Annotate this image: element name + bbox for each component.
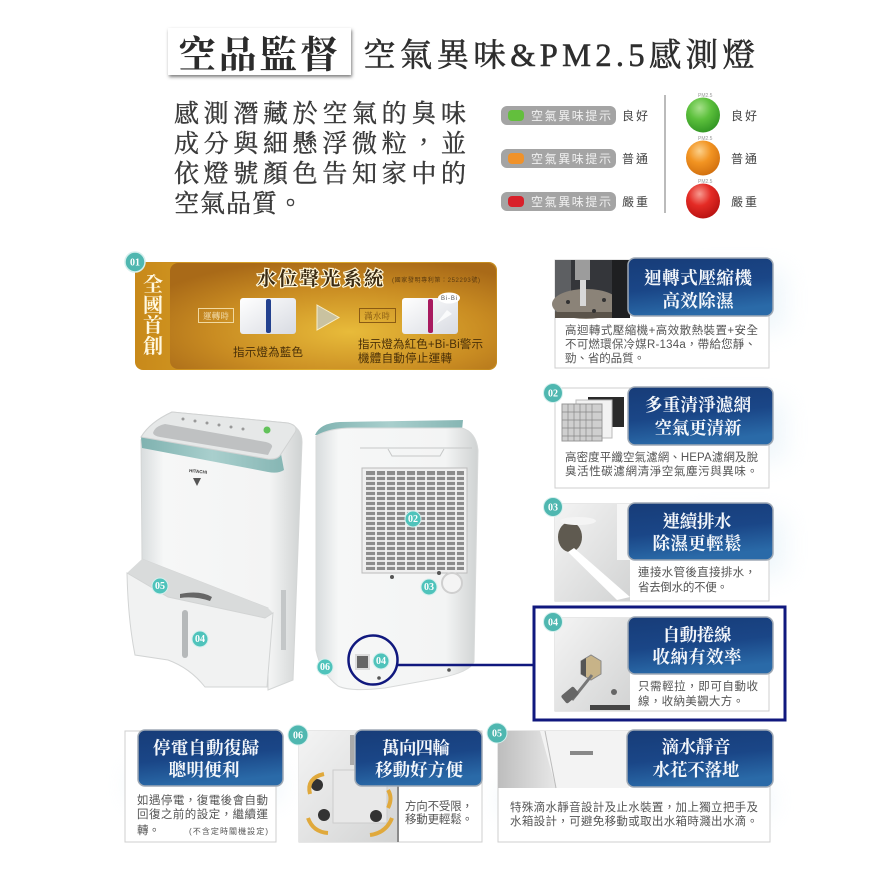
- badge 05: 05: [492, 728, 502, 740]
- badge 06 rear: [317, 659, 333, 675]
- description: 勁、省的品質。: [565, 351, 645, 365]
- description: [565, 450, 758, 478]
- panel 06: four-way casters: [299, 730, 482, 842]
- intro text block: [174, 100, 466, 218]
- card: red indicator with Bi-Bi bubble: [402, 292, 460, 334]
- photo: compressor: [552, 260, 630, 319]
- vertical heading: 創: [143, 335, 163, 358]
- photo: casters: [299, 731, 398, 842]
- soft background glow: [130, 270, 785, 815]
- legend: odor indicator pills: [501, 106, 648, 211]
- badge 02 rear: 02: [408, 514, 418, 525]
- description: 只需輕拉，即可自動收: [638, 679, 758, 693]
- badge 01: [125, 252, 145, 272]
- badge 03: 03: [548, 502, 558, 514]
- intro text block: 成分與細懸浮微粒，並: [174, 130, 466, 158]
- badge 03 rear: 03: [424, 582, 434, 593]
- legend: PM2.5 indicator lights: PM2.5: [698, 136, 713, 142]
- panel: water level sound and light system: [135, 262, 497, 370]
- legend: odor indicator pills: 空氣異味提示: [531, 108, 611, 123]
- photo: filter set: [562, 397, 624, 441]
- header: 聰明便利: [168, 760, 240, 780]
- legend: odor indicator pills: 良好: [622, 108, 648, 123]
- full state label: [360, 308, 396, 322]
- badge 05: [487, 723, 507, 743]
- vertical heading: 全: [143, 273, 163, 296]
- header: 除濕更輕鬆: [652, 534, 742, 554]
- intro text block: 感測潛藏於空氣的臭味: [174, 100, 466, 128]
- badge 06 rear: 06: [320, 662, 330, 673]
- legend: odor indicator pills: 空氣異味提示: [531, 151, 611, 166]
- photo: water tank: [498, 731, 629, 788]
- header: 高效除濕: [662, 291, 735, 311]
- legend: PM2.5 indicator lights: PM2.5: [698, 93, 713, 99]
- legend: odor indicator pills: 空氣異味提示: [531, 194, 611, 209]
- legend: odor indicator pills: 普通: [622, 151, 648, 166]
- subtitle: 空氣異味&PM2.5感測燈: [363, 37, 755, 74]
- description: [638, 565, 756, 594]
- running state label: 運轉時: [203, 311, 229, 321]
- header: [628, 387, 773, 445]
- description: 回復之前的設定，繼續運: [137, 807, 268, 821]
- banner heading: 水位聲光系統: [257, 267, 385, 290]
- dehumidifier: rear view: [315, 420, 478, 690]
- badge 01: 01: [130, 258, 140, 268]
- description: 高迴轉式壓縮機+高效散熱裝置+安全: [565, 323, 758, 337]
- badge 04 front: 04: [195, 634, 205, 645]
- description: [137, 793, 268, 837]
- caption: blue: 指示燈為藍色: [233, 345, 304, 359]
- description: 特殊滴水靜音設計及止水裝置，加上獨立把手及: [510, 800, 758, 814]
- badge 02: 02: [548, 388, 558, 400]
- description: [638, 679, 758, 708]
- card: red indicator with Bi-Bi bubble: Bi-Bi: [441, 296, 457, 302]
- legend: odor indicator pills: 嚴重: [622, 195, 648, 209]
- header: 停電自動復歸: [153, 738, 260, 758]
- header: 水花不落地: [652, 760, 740, 780]
- full state label: 滿水時: [364, 311, 390, 321]
- panel 05: quiet drip: [498, 730, 773, 842]
- arrow: [317, 305, 339, 330]
- title badge: 空品監督: [178, 35, 338, 77]
- description: 方向不受限，: [405, 799, 473, 813]
- badge 04: 04: [548, 618, 558, 628]
- description: (不含定時關機設定): [189, 826, 268, 836]
- header: [627, 730, 773, 787]
- badge 05 front: [152, 578, 168, 594]
- badge 04 rear: 04: [376, 656, 386, 667]
- badge 03 rear: [421, 579, 437, 595]
- badge 04 front: [192, 631, 208, 647]
- description: 連接水管後直接排水，: [638, 565, 756, 579]
- water tank: [127, 559, 273, 687]
- description: [405, 799, 473, 826]
- panel 3: continuous drainage: [555, 503, 773, 601]
- description: 移動更輕鬆。: [405, 812, 473, 826]
- header: [628, 258, 773, 316]
- header: [628, 617, 773, 674]
- vertical heading: [143, 273, 163, 358]
- patent note: (國家發明專利第：252293號): [392, 276, 480, 284]
- running state label: [198, 308, 234, 322]
- panel 1: rotary compressor: [552, 258, 773, 368]
- badge 04: [544, 612, 562, 632]
- vertical heading: 首: [143, 314, 163, 337]
- badge 03: [544, 498, 562, 516]
- badge 06: [288, 725, 308, 745]
- badge 02 rear: [405, 511, 421, 527]
- intro text block: 依燈號顏色告知家中的: [174, 160, 466, 188]
- description: [565, 323, 758, 365]
- photo: drain outlet: [555, 504, 630, 601]
- header: 迴轉式壓縮機: [644, 268, 752, 288]
- header: 連續排水: [662, 512, 732, 532]
- photo: power plug: [555, 618, 630, 711]
- badge 02: [544, 384, 562, 402]
- description: 水箱設計，可避免移動或取出水箱時濺出水滴。: [510, 814, 758, 828]
- header: 多重清淨濾網: [645, 395, 752, 415]
- description: 轉。: [137, 824, 160, 837]
- legend: PM2.5 indicator lights: 普通: [731, 151, 757, 166]
- caption: red: [358, 337, 483, 365]
- panel 2: filters: [555, 387, 773, 488]
- panel 4: auto cord rewind, highlighted: [534, 607, 785, 720]
- description: 高密度平纖空氣濾網、HEPA濾網及脫: [565, 450, 758, 464]
- caption: red: 指示燈為紅色+Bi-Bi警示: [358, 337, 483, 351]
- description: 如遇停電，復電後會自動: [137, 793, 268, 807]
- panel: power failure recovery: [125, 730, 283, 842]
- dehumidifier: front view: HITACHI: [189, 468, 207, 475]
- badge 04 rear: [373, 653, 389, 669]
- header: [628, 503, 773, 560]
- header: [355, 730, 482, 786]
- legend: PM2.5 indicator lights: 良好: [731, 108, 757, 123]
- header: 移動好方便: [375, 760, 464, 780]
- description: [510, 800, 758, 828]
- dehumidifier: front view: [127, 412, 302, 690]
- intro text block: 空氣品質。: [174, 190, 303, 218]
- header: 空氣更清新: [654, 418, 742, 438]
- header: 滴水靜音: [662, 737, 730, 757]
- description: 省去倒水的不便。: [638, 580, 728, 594]
- vertical heading: 國: [143, 294, 163, 317]
- legend: PM2.5 indicator lights: PM2.5: [698, 179, 713, 185]
- badge 05 front: 05: [155, 581, 165, 592]
- header: 自動捲線: [662, 625, 732, 645]
- legend: PM2.5 indicator lights: 嚴重: [731, 195, 757, 209]
- air filter grille: [362, 468, 467, 573]
- legend: PM2.5 indicator lights: [686, 93, 757, 218]
- header: 萬向四輪: [382, 738, 450, 758]
- header: 收納有效率: [652, 647, 742, 667]
- caption: red: 機體自動停止運轉: [358, 351, 452, 365]
- card: blue indicator: [240, 298, 296, 334]
- description: 線，收納美觀大方。: [638, 694, 744, 708]
- header: [138, 730, 283, 786]
- description: 不可燃環保冷媒R-134a，帶給您靜、: [565, 337, 756, 351]
- callout line from cord socket to panel 4: [348, 636, 534, 684]
- description: 臭活性碳濾網清淨空氣塵污與異味。: [565, 464, 758, 478]
- badge 06: 06: [293, 730, 303, 742]
